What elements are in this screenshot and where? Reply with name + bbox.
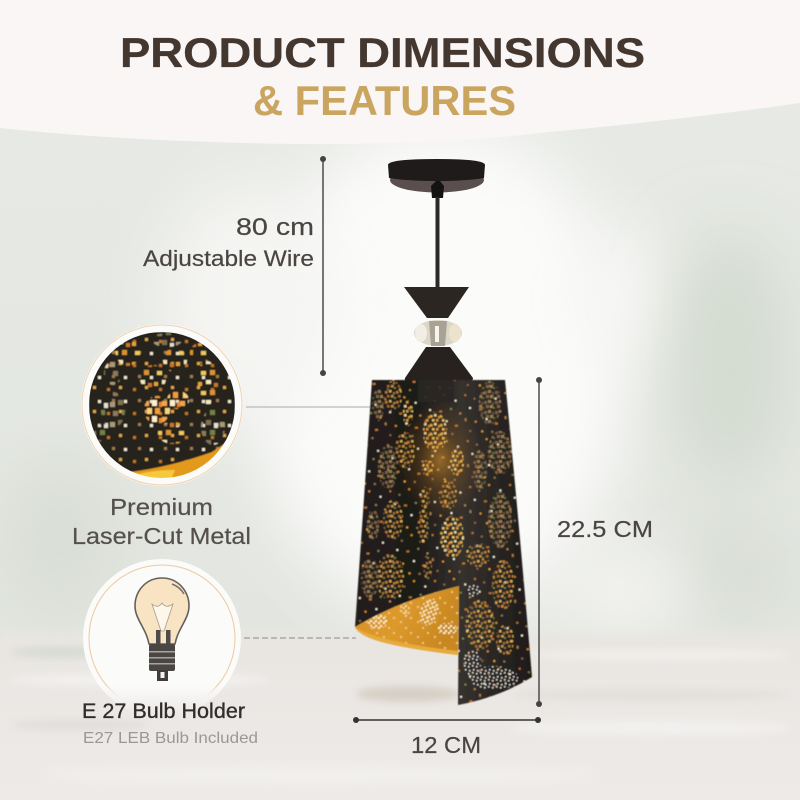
text: bulb holder [82,700,258,747]
text: bulb holder: E27 LEB Bulb Included [83,730,258,747]
lower cone [405,347,473,381]
dimension: wire height [320,156,326,376]
crystal bead [414,320,462,346]
wire [436,197,440,288]
ceiling canopy [388,159,485,198]
title: PRODUCT DIMENSIONS [120,29,645,76]
icon: light bulb [135,578,189,681]
lamp shade [350,376,540,711]
label: wire length: Adjustable Wire [143,246,314,271]
connector: detail to shade [246,406,370,408]
dimension: shade width [353,717,541,723]
label: shade height: 22.5 CM [557,516,653,542]
text: bulb holder: E 27 Bulb Holder [82,700,245,723]
feature: bulb holder [83,559,241,717]
background: misty studio backdrop [0,104,800,742]
top white curved banner [0,0,800,144]
feature: laser-cut metal detail [81,324,243,486]
label: wire length [143,214,314,271]
connector: bulb holder to shade [244,637,356,639]
dimension: shade height [536,377,542,707]
text: laser-cut metal [72,494,251,549]
title [120,29,645,124]
label: wire length: 80 cm [236,214,314,241]
detail photo [89,332,235,482]
label: shade width: 12 CM [411,732,481,758]
pendant lamp [350,159,540,711]
upper cone [404,287,469,318]
text: laser-cut metal: Premium [110,494,213,520]
text: laser-cut metal: Laser-Cut Metal [72,523,251,549]
title: & FEATURES [253,77,516,124]
